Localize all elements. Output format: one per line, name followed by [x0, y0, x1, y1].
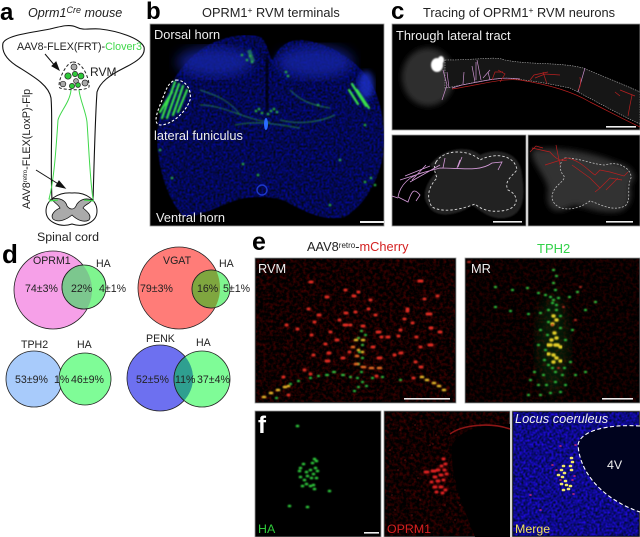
label HA image: HA	[258, 522, 276, 536]
panel c: neuron tracing	[391, 0, 640, 226]
cell bodies	[60, 64, 88, 89]
OPRM1 red cluster	[425, 459, 447, 493]
OPRM1 red scattered	[390, 425, 460, 525]
venn PENK: 11%	[175, 374, 196, 386]
heading: Oprm1 Cre mouse: mouse	[81, 6, 122, 20]
text: AAV8 retro FLEX(LoxP)-Flp: retro	[23, 169, 29, 182]
image c bottom left	[392, 135, 526, 226]
arrow to RVM	[45, 54, 59, 70]
image c bottom right	[528, 135, 640, 226]
venn VGAT: 16%	[197, 283, 219, 295]
scale bar c right	[606, 221, 633, 223]
heading AAV8 retro mCherry: mCherry	[360, 239, 409, 254]
venn PENK: 37±4%	[197, 374, 230, 386]
venn TPH2	[6, 339, 111, 407]
venn OPRM1: 74±3%	[25, 283, 58, 295]
MR green glow	[537, 295, 569, 395]
venn VGAT: HA	[219, 258, 235, 270]
panel f: locus coeruleus micrographs	[255, 411, 640, 537]
image OPRM1	[384, 411, 510, 537]
MR red accents	[468, 262, 581, 368]
heading b: RVM terminals	[252, 5, 340, 20]
label dorsal horn: Dorsal horn	[154, 27, 220, 42]
arrow to spinal cord	[36, 170, 65, 188]
venn VGAT	[138, 247, 251, 329]
text: AAV8 retro FLEX(LoxP)-Flp: -FLEX(LoxP)-Flp	[21, 89, 33, 170]
image HA	[255, 411, 381, 537]
green fibres	[160, 50, 375, 205]
red traced neurons	[452, 70, 640, 127]
dashed lateral funiculus outline	[156, 80, 190, 125]
label locus coeruleus: Locus coeruleus	[515, 411, 609, 426]
venn OPRM1	[14, 251, 127, 329]
heading AAV8 retro mCherry: AAV8	[307, 239, 339, 254]
label d: d	[2, 239, 18, 269]
pink axons bottom left	[392, 157, 502, 202]
RVM red haze	[256, 259, 455, 402]
scale bar f	[364, 532, 379, 534]
RVM yellow and orange cells	[263, 340, 445, 397]
image merge	[512, 411, 640, 537]
venn OPRM1: HA	[96, 258, 112, 270]
injection site	[431, 56, 444, 72]
brain and cord outline	[3, 26, 144, 200]
merge ventricle 4V	[578, 426, 640, 512]
venn OPRM1: OPRM1	[33, 255, 71, 267]
scale bar c top	[606, 126, 636, 128]
label ventral horn: Ventral horn	[156, 210, 225, 225]
label MR: MR	[471, 261, 491, 276]
RVM dashed region	[59, 62, 89, 90]
spinal section in blue	[157, 35, 384, 218]
venn TPH2: 1%	[54, 374, 70, 386]
venn TPH2: 46±9%	[71, 374, 104, 386]
heading: Oprm1 Cre mouse: Oprm1	[28, 6, 66, 20]
venn OPRM1: 22%	[71, 283, 93, 295]
label spinal cord: Spinal cord	[37, 230, 99, 244]
venn VGAT: VGAT	[163, 255, 192, 267]
scale bar b	[360, 221, 384, 223]
scale bar e right	[602, 398, 633, 400]
venn VGAT: 5±1%	[223, 283, 251, 295]
MR yellow midline cells	[548, 316, 561, 362]
MR red haze	[466, 259, 639, 402]
heading AAV8 retro mCherry: -	[355, 239, 360, 254]
panel a: injection schematic	[0, 0, 144, 244]
venn TPH2: TPH2	[21, 339, 48, 351]
label merge: Merge	[515, 522, 550, 536]
section bottom left	[425, 149, 523, 218]
venn OPRM1: 4±1%	[99, 283, 127, 295]
pink traced neurons	[442, 60, 585, 100]
panel d: Venn diagrams	[2, 239, 251, 411]
heading c: +	[528, 5, 534, 15]
heading TPH2: TPH2	[537, 241, 570, 256]
heading c: Tracing of OPRM1	[423, 5, 528, 20]
label RVM: RVM	[90, 65, 116, 79]
MR green cells	[495, 270, 596, 395]
RVM green midline	[276, 331, 401, 398]
venn PENK	[127, 333, 230, 411]
image b background	[150, 24, 384, 226]
HA green cells	[289, 426, 330, 507]
venn TPH2: 53±9%	[15, 374, 48, 386]
venn PENK: HA	[196, 337, 212, 349]
scale bar e left	[404, 398, 450, 400]
heading b: OPRM1	[202, 5, 248, 20]
brain blob	[402, 48, 454, 106]
spinal cord cross-section	[46, 193, 97, 225]
venn TPH2: HA	[77, 339, 93, 351]
section bottom right	[532, 149, 634, 212]
heading b: +	[248, 5, 253, 15]
image RVM	[255, 258, 456, 403]
ventricle rim	[450, 425, 510, 434]
venn PENK: 52±5%	[136, 374, 169, 386]
text: AAV8 retro FLEX(LoxP)-Flp: AAV8	[21, 182, 33, 209]
label f: f	[258, 412, 267, 439]
heading: Oprm1 Cre mouse: Cre	[66, 5, 81, 15]
image MR	[465, 258, 640, 403]
panel e: RVM and MR micrographs	[252, 228, 640, 403]
ventral vessel	[257, 185, 267, 195]
panel b: spinal cord terminals	[146, 0, 384, 226]
dark ventricle	[452, 424, 510, 537]
scale bar c left	[493, 221, 522, 223]
cord body	[445, 58, 640, 124]
venn VGAT: 79±3%	[140, 283, 173, 295]
label e: e	[252, 228, 266, 256]
text: AAV8-FLEX(FRT)-Clover3: AAV8-FLEX(FRT)-Clover3	[17, 41, 142, 53]
merge blue noise	[513, 412, 639, 536]
OPRM1 red haze	[385, 412, 509, 536]
red axons bottom right	[530, 145, 628, 192]
label lateral funiculus: lateral funiculus	[154, 128, 243, 143]
image c top	[392, 24, 640, 130]
venn PENK: PENK	[146, 333, 175, 345]
green projection axons	[49, 90, 93, 201]
merge dashed ventricle edge	[578, 426, 640, 512]
merge magenta cells	[530, 445, 576, 510]
dashed outline bottom right	[552, 158, 631, 209]
label 4V: 4V	[607, 458, 623, 472]
merge yellow cells	[558, 458, 573, 490]
central canal	[264, 118, 268, 130]
label RVM image: RVM	[258, 261, 286, 276]
label through lateral tract: Through lateral tract	[396, 28, 511, 43]
RVM red cells	[283, 281, 441, 395]
heading c: RVM neurons	[533, 5, 615, 20]
heading AAV8 retro mCherry: retro	[339, 241, 356, 250]
label OPRM1 image: OPRM1	[387, 522, 431, 536]
dashed outline bottom left	[429, 152, 517, 211]
RVM orange band	[352, 347, 381, 368]
